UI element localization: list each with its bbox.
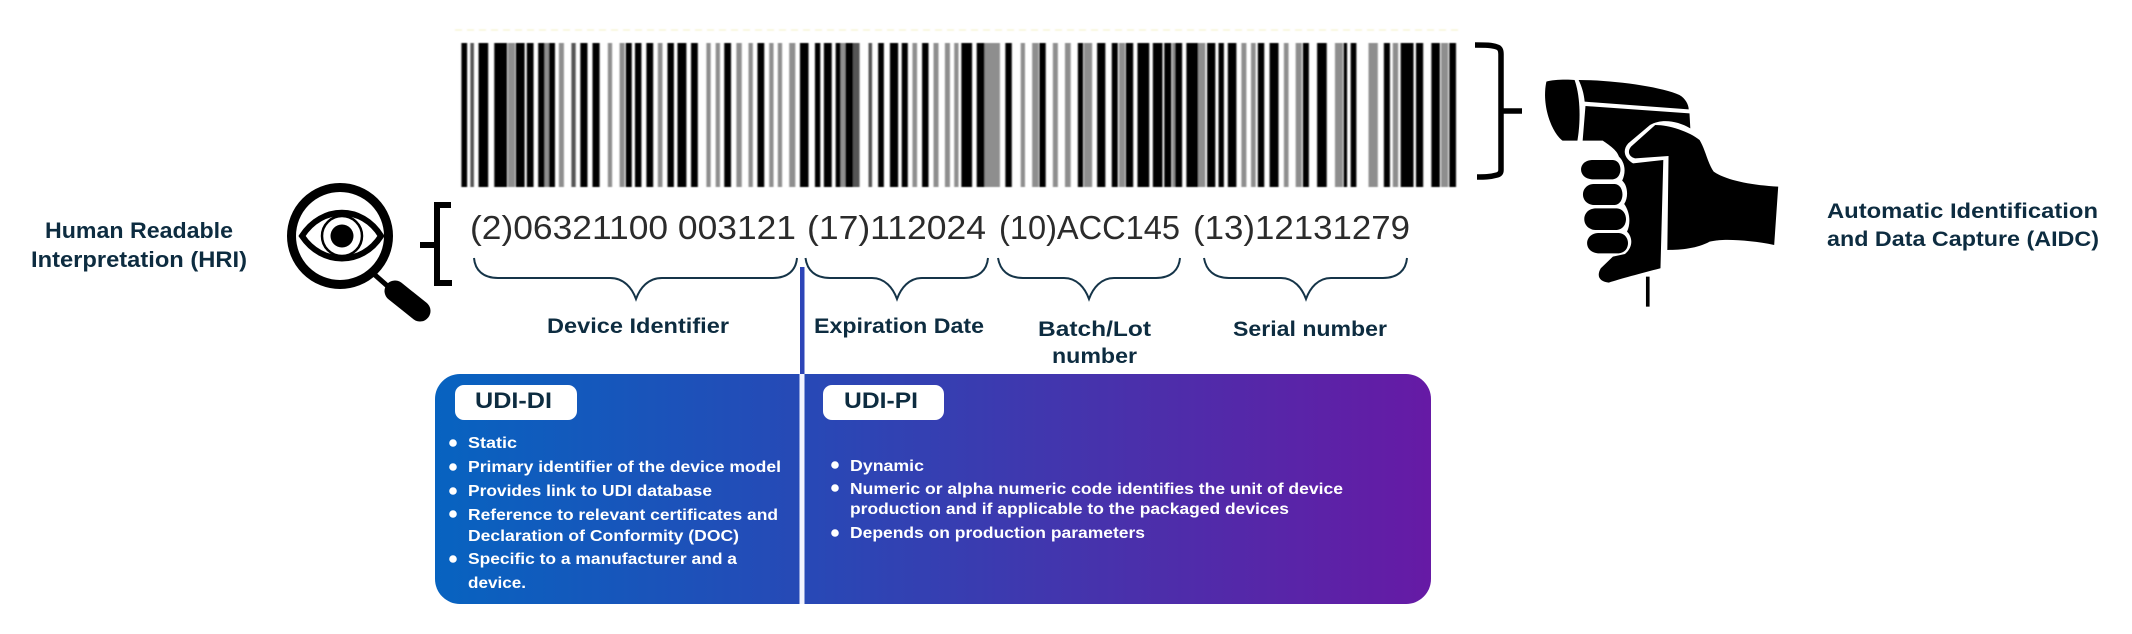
list: UDI-DI properties	[449, 435, 781, 592]
label: Device Identifier: Device Identifier	[547, 315, 729, 338]
list: UDI-PI properties: Depends on production parameters	[850, 525, 1145, 542]
divider line	[800, 267, 804, 604]
icon: barcode scanner in hand	[1545, 80, 1778, 307]
hand	[1629, 125, 1778, 250]
list: UDI-DI properties: Provides link to UDI database	[468, 483, 712, 500]
badge: UDI-DI: UDI-DI	[475, 388, 552, 413]
list: UDI-DI properties: Declaration of Conformity (DOC)	[468, 528, 739, 545]
list: UDI-PI properties: Numeric or alpha numeric code identifies the unit of device	[850, 481, 1343, 498]
cord	[1646, 277, 1650, 307]
list: UDI-PI properties: Dynamic	[850, 458, 924, 475]
scanner head	[1545, 80, 1580, 141]
list: UDI-DI properties: Primary identifier of the device model	[468, 459, 781, 476]
label: Serial number: Serial number	[1233, 318, 1387, 341]
bracket: barcode to scanner	[1475, 45, 1522, 177]
list: UDI-DI properties: Reference to relevant certificates and	[468, 507, 778, 524]
barcode readable digits	[470, 209, 1410, 246]
barcode readable digits: (10)ACC145	[999, 209, 1180, 246]
label: Expiration Date: Expiration Date	[814, 315, 984, 338]
label: Human Readable Interpretation: Human Readable	[45, 218, 233, 243]
bracket: human readable text	[420, 205, 452, 283]
fingers	[1581, 160, 1628, 253]
barcode readable digits: (2)06321100 003121	[470, 209, 796, 246]
list: UDI-PI properties	[831, 458, 1343, 542]
label: Human Readable Interpretation	[31, 218, 247, 272]
label: Batch/Lot number: Batch/Lot	[1038, 318, 1151, 341]
brace: expiration date	[806, 258, 988, 299]
icon: magnifying glass with eye	[292, 188, 420, 311]
barcode readable digits: (13)12131279	[1193, 209, 1410, 246]
brace: serial number	[1204, 258, 1407, 299]
label: Human Readable Interpretation: Interpretation (HRI)	[31, 247, 247, 272]
scanner grip	[1583, 106, 1690, 283]
barcode readable digits: (17)112024	[807, 209, 986, 246]
list: UDI-DI properties: Specific to a manufacturer and a	[468, 551, 737, 568]
scanner top	[1579, 80, 1689, 109]
panel: UDI gradient	[435, 267, 1431, 604]
label: Batch/Lot number	[1038, 318, 1151, 368]
label: Batch/Lot number: number	[1052, 345, 1137, 368]
list: UDI-DI properties: Static	[468, 435, 517, 452]
list: UDI-PI properties: production and if applicable to the packaged devices	[850, 501, 1289, 518]
badge: UDI-DI	[455, 385, 577, 420]
label: Automatic Identification and Data Capture: and Data Capture (AIDC)	[1827, 228, 2099, 251]
label: Automatic Identification and Data Capture	[1827, 200, 2099, 251]
brace: device identifier	[474, 258, 797, 299]
brace: batch number	[998, 258, 1180, 299]
list: UDI-DI properties: device.	[468, 575, 526, 592]
badge: UDI-PI	[823, 385, 944, 420]
label: Automatic Identification and Data Capture: Automatic Identification	[1827, 200, 2098, 223]
barcode	[455, 30, 1462, 187]
badge: UDI-PI: UDI-PI	[844, 388, 918, 413]
